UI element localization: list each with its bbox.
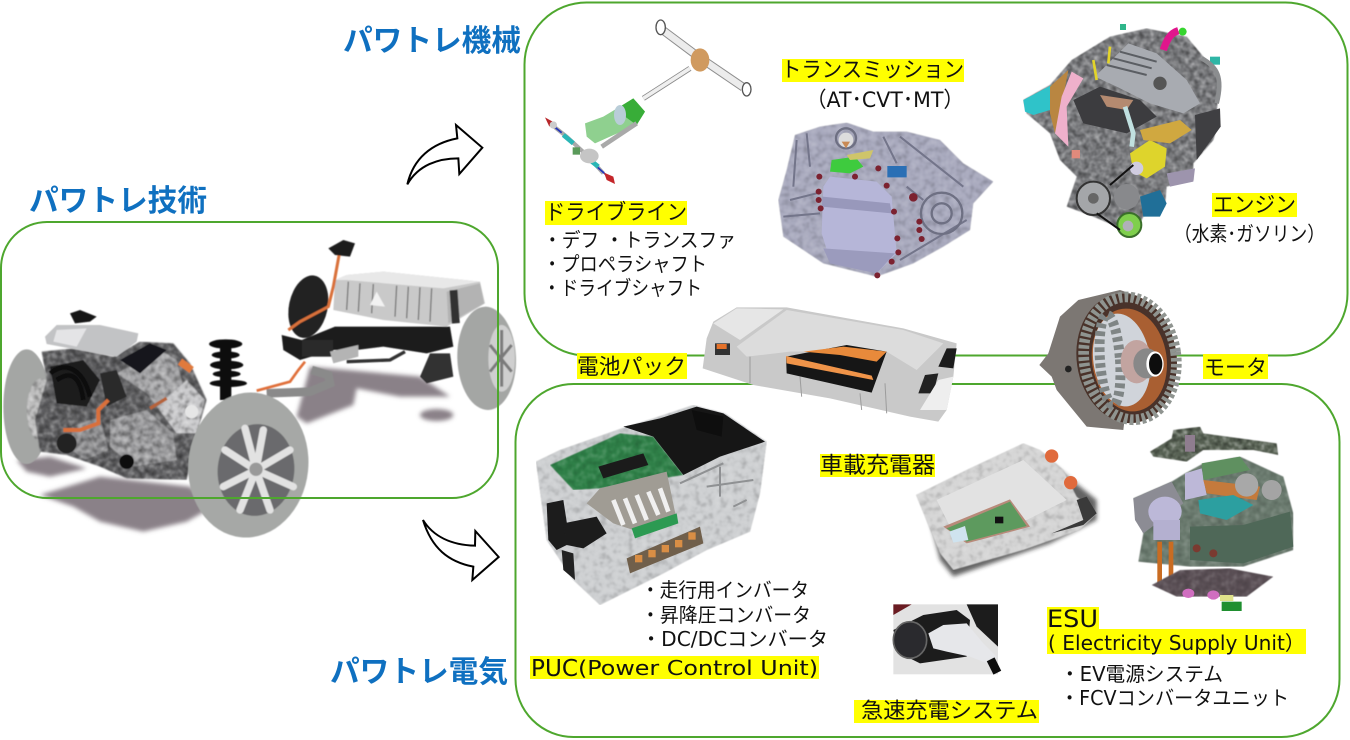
label: ESU: ( Electricity Supply Unit）: [1048, 631, 1305, 655]
image: hybrid car chassis: [3, 240, 518, 544]
exhaust rod and cable: [267, 370, 330, 393]
high voltage battery: [333, 272, 485, 327]
image: electricity supply unit: [1133, 427, 1293, 611]
panel: powertrain electrical: [516, 384, 1340, 737]
label: on-board charger: 車載充電器: [820, 453, 935, 479]
text: driveline items: [543, 228, 736, 300]
heading: powertrain technology: パワトレ技術: [29, 185, 207, 218]
text: ESU items: ・EV電源システム: [1060, 662, 1223, 686]
label: driveline: ドライブライン: [545, 200, 687, 226]
text: engine types: （水素･ガソリン）: [1174, 222, 1325, 246]
text: PCU items: ・走行用インバータ: [641, 578, 809, 602]
label: ESU: [1047, 605, 1306, 655]
panel: powertrain technology: [1, 222, 498, 498]
arrow: to mechanical: [407, 125, 482, 184]
image: power control unit: [536, 405, 767, 605]
text: ESU items: [1060, 662, 1289, 710]
heading: powertrain mechanical: パワトレ機械: [343, 25, 521, 58]
label: PUC power control unit: PUC: [531, 654, 578, 682]
vehicle shadows: [17, 367, 453, 532]
strut and spring: [209, 339, 247, 400]
label: battery pack: 電池パック: [577, 355, 686, 380]
engine block: [35, 310, 207, 480]
rear-left tire: [283, 272, 334, 342]
label: quick charging system: 急速充電システム: [861, 699, 1038, 724]
label: ESU: ESU: [1047, 605, 1098, 633]
label: PUC power control unit: (Power Control Unit): [578, 656, 818, 680]
image: transmission: [778, 123, 993, 278]
text: driveline items: ・ドライブシャフト: [543, 276, 702, 300]
text: PCU items: ・DC/DCコンバータ: [641, 627, 828, 651]
image: quick charging port: [893, 604, 998, 674]
text: ESU items: ・FCVコンバータユニット: [1060, 686, 1289, 710]
label: PUC power control unit: [530, 654, 819, 682]
label: motor: モータ: [1204, 356, 1267, 381]
front wheel: [181, 386, 316, 544]
text: transmission types: （AT･CVT･MT）: [806, 88, 964, 113]
image: on-board charger: [916, 443, 1097, 577]
text: PCU items: ・昇降圧コンバータ: [641, 603, 811, 627]
image: driveline: [545, 20, 751, 184]
rear-right wheel: [456, 306, 518, 411]
image: motor: [1039, 287, 1185, 430]
text: driveline items: ・デフ ・トランスファ: [543, 228, 736, 252]
heading: powertrain electrical: パワトレ電気: [330, 656, 508, 689]
panel: powertrain mechanical: [524, 2, 1348, 356]
left front tire: [3, 349, 50, 464]
text: PCU items: [641, 578, 828, 651]
label: transmission: トランスミッション: [781, 58, 964, 83]
rear subframe: [282, 327, 453, 360]
text: driveline items: ・プロペラシャフト: [543, 252, 707, 276]
orange cables and connector: [288, 250, 340, 330]
arrow: to electrical: [423, 520, 499, 580]
image: engine: [1023, 24, 1221, 237]
image: battery pack: [703, 307, 957, 422]
inner brake disc: [27, 378, 57, 442]
label: engine: エンジン: [1213, 193, 1296, 218]
